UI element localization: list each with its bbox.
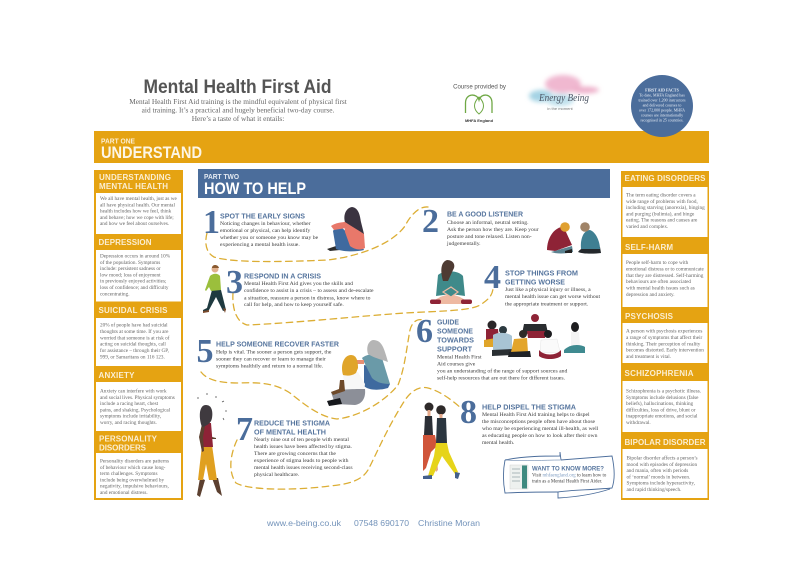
- card: suicidal crisis: [96, 306, 181, 366]
- card: understanding mental health: and behave; how we cope with life;: [100, 214, 174, 221]
- step 8: help dispel the stigma: who may be experiencing mental ill-health, as well: [482, 426, 599, 432]
- card: bipolar disorder: Symptoms include hyperactivity,: [626, 481, 695, 487]
- step 7: reduce the stigma of mental health: [236, 411, 353, 478]
- step 4: stop things from getting worse: GETTING WORSE: [505, 278, 565, 286]
- step 6: guide someone towards support: 6: [416, 313, 433, 350]
- card: depression: low mood; loss of enjoyment: [100, 271, 161, 278]
- step 4: stop things from getting worse: [484, 259, 601, 308]
- card: suicidal crisis: 20% of people have had suicidal: [100, 322, 168, 328]
- step 8: help dispel the stigma: [460, 394, 599, 446]
- title: Mental Health First Aid: [144, 76, 332, 98]
- card: personality disorders: Personality disorders are patterns: [100, 458, 169, 464]
- callout: first aid facts: trained over 1,200 instructors: [638, 98, 686, 104]
- step 3: respond in a crisis: confidence to assist in a crisis – to assess and de-escalate: [244, 287, 374, 294]
- step 1: spot the early signs: whether you or someone you know may be: [220, 235, 319, 241]
- card: schizophrenia: [622, 369, 708, 432]
- callout: first aid facts: over 172,000 people. MHFA: [639, 108, 685, 114]
- step 2: be a good listener: BE A GOOD LISTENER: [447, 210, 523, 218]
- card: understanding mental health: health includes how we feel, think: [100, 208, 172, 215]
- card: anxiety: pains, and shaking. Psychological: [100, 407, 171, 413]
- step 1: spot the early signs: experiencing a mental health issue.: [220, 242, 300, 248]
- step 6: guide someone towards support: you an understanding of the range of support sources and: [437, 368, 567, 374]
- card: bipolar disorder: [622, 438, 708, 498]
- step 8: help dispel the stigma: 8: [460, 394, 477, 431]
- step 6: guide someone towards support: SOMEONE: [437, 326, 473, 336]
- step 1: spot the early signs: Noticing changes in behaviour, whether: [220, 221, 311, 227]
- step 6: guide someone towards support: SUPPORT: [437, 344, 472, 354]
- step 6: guide someone towards support: self-help resources that are out there for different issues.: [437, 374, 566, 382]
- card: schizophrenia: Schizophrenia is a psychotic illness.: [626, 388, 701, 394]
- icon: man walking: [203, 265, 226, 313]
- step 7: reduce the stigma of mental health: 7: [236, 411, 253, 448]
- icon: woman sitting alone: [327, 207, 365, 251]
- step 1: spot the early signs: SPOT THE EARLY SIGNS: [220, 212, 305, 220]
- card: psychosis: a range of symptoms that affect their: [626, 334, 703, 341]
- step 3: respond in a crisis: [226, 264, 374, 308]
- card: schizophrenia: Symptoms include delusions (false: [626, 394, 699, 401]
- logo: course provider MHFA England: Course provided by: [453, 84, 507, 90]
- card: psychosis: PSYCHOSIS: [625, 312, 674, 321]
- card: psychosis: [622, 312, 708, 363]
- step 4: stop things from getting worse: 4: [484, 259, 501, 296]
- card: self-harm: that they are distressed. Self-harming: [626, 272, 704, 279]
- card: understanding mental health: and how we feel about ourselves.: [100, 220, 169, 227]
- card: eating disorders: and purging (bulimia), and binge: [626, 210, 695, 217]
- card: suicidal crisis: acting on suicidal thoughts, call: [100, 342, 166, 348]
- part two banner: [198, 169, 610, 198]
- card: depression: [96, 238, 181, 302]
- callout: first aid facts: To date, MHFA England has: [639, 92, 685, 98]
- card: eating disorders: wide range of problems with food,: [626, 198, 698, 205]
- step 3: respond in a crisis: call for help, and how to keep yourself safe.: [244, 301, 344, 308]
- step 6: guide someone towards support: Mental Health First: [437, 354, 482, 360]
- step 7: reduce the stigma of mental health: REDUCE THE STIGMA: [254, 419, 330, 428]
- card: bipolar disorder: and mania, often with periods: [626, 467, 688, 474]
- logo: Energy Being: Energy Being: [538, 93, 589, 104]
- icon: course manual: [510, 465, 528, 489]
- card: self-harm: People self-harm to cope with: [626, 259, 689, 266]
- card: suicidal crisis: 999, or Samaritans on 116 123.: [100, 354, 165, 360]
- icon: woman walking surrounded by stigma marks: [197, 393, 227, 497]
- card: psychosis: thinking. Their perception of reality: [626, 340, 701, 347]
- part one banner: UNDERSTAND: [101, 144, 202, 162]
- step 3: respond in a crisis: Mental Health First Aid gives you the skills and: [244, 281, 353, 287]
- step 8: help dispel the stigma: mental health.: [482, 440, 515, 446]
- card: psychosis: becomes distorted. Early intervention: [626, 348, 704, 354]
- icon: two people talking: [547, 222, 601, 254]
- part two banner: PART TWO: [204, 174, 240, 181]
- card: anxiety: and social lives. Physical symptoms: [100, 395, 175, 401]
- card: personality disorders: term challenges. Symptoms: [100, 471, 158, 477]
- card: schizophrenia: inappropriate emotions, and social: [626, 414, 698, 420]
- card: depression: in previously enjoyed activities;: [100, 279, 167, 285]
- step 7: reduce the stigma of mental health: health issues have been affected by stigma.: [254, 443, 353, 450]
- step 5: help someone recover faster: Help is vital. The sooner a person gets support, the: [216, 350, 332, 356]
- card: self-harm: SELF-HARM: [625, 243, 673, 252]
- step 5: help someone recover faster: HELP SOMEONE RECOVER FASTER: [216, 340, 339, 349]
- step 8: help dispel the stigma: the misconceptions people often have about those: [482, 418, 596, 425]
- card: schizophrenia: SCHIZOPHRENIA: [624, 369, 694, 378]
- step 7: reduce the stigma of mental health: experience of stigma leads to people with: [254, 457, 349, 464]
- step 2: be a good listener: 2: [422, 203, 439, 240]
- icon: woman comforting a friend: [327, 340, 390, 406]
- step 3: respond in a crisis: a situation, reassure a person in distress, know where to: [244, 296, 371, 302]
- card: schizophrenia: beliefs), hallucinations, thinking: [626, 400, 694, 407]
- card: eating disorders: including starving (anorexia), binging: [626, 204, 705, 211]
- card: eating disorders: EATING DISORDERS: [624, 174, 706, 183]
- card: bipolar disorder: Bipolar disorder affects a person’s: [626, 454, 698, 462]
- step 7: reduce the stigma of mental health: physical healthcare.: [254, 472, 300, 478]
- card: anxiety: ANXIETY: [98, 371, 135, 380]
- logo: course provider MHFA England: MHFA England: [465, 118, 494, 123]
- step 1: spot the early signs: emotional or physical, can help identify: [220, 227, 310, 234]
- step 8: help dispel the stigma: as educating people on how to look after their own: [482, 432, 598, 439]
- step 4: stop things from getting worse: the appropriate treatment or support.: [505, 302, 589, 308]
- step 2: be a good listener: posture and tone relaxed. Listen non-: [447, 234, 532, 240]
- step 2: be a good listener: [422, 203, 539, 247]
- dashed path: step 1 to 2: [206, 207, 428, 262]
- card: depression: DEPRESSION: [98, 238, 152, 247]
- card: eating disorders: varied and complex.: [626, 224, 668, 230]
- card: anxiety: worry, and racing thoughts.: [100, 420, 157, 426]
- step 4: stop things from getting worse: Just like a physical injury or illness, a: [505, 287, 591, 293]
- card: anxiety: include a racing heart, chest: [100, 401, 159, 407]
- intro text: Here’s a taste of what it entails:: [192, 114, 284, 123]
- card: personality disorders: of behaviour which cause long-: [100, 464, 166, 471]
- card: depression: of the population. Symptoms: [100, 259, 160, 266]
- card: bipolar disorder: and rapid thinking/speech.: [626, 487, 681, 493]
- card: understanding mental health: UNDERSTANDING: [99, 173, 171, 182]
- footer contact details: Christine Moran: [418, 518, 480, 528]
- card: self-harm: depression and anxiety.: [626, 292, 674, 298]
- step 7: reduce the stigma of mental health: Nearly nine out of ten people with mental: [254, 436, 349, 443]
- step 4: stop things from getting worse: mental health issue can get worse without: [505, 294, 601, 300]
- card: psychosis: and treatment is vital.: [626, 354, 671, 360]
- card: schizophrenia: difficulties, loss of drive, blunt or: [626, 406, 696, 413]
- part one banner: [94, 131, 709, 163]
- card: eating disorders: [622, 174, 708, 237]
- step 2: be a good listener: Ask the person how they are. Keep your: [447, 227, 539, 233]
- footer contact details: www.e-being.co.uk: [266, 518, 342, 528]
- part two banner: HOW TO HELP: [204, 180, 306, 198]
- card: personality disorders: PERSONALITY: [99, 434, 158, 444]
- card: personality disorders: negativity, impulsive behaviours,: [100, 484, 169, 490]
- card: bipolar disorder: of ‘normal’ moods in between.: [626, 473, 690, 480]
- card: understanding mental health: We all have mental health, just as we: [100, 196, 177, 202]
- step 2: be a good listener: judgementally.: [446, 241, 481, 247]
- card: personality disorders: DISORDERS: [99, 444, 147, 452]
- callout: first aid facts: courses are internationally: [641, 112, 683, 118]
- card: personality disorders: include being overwhelmed by: [100, 477, 165, 483]
- card: anxiety: [96, 371, 181, 431]
- dashed path: step 3 to 4: [233, 289, 493, 325]
- dashed path: step 5 to 6: [201, 320, 425, 419]
- step 1: spot the early signs: 1: [203, 204, 220, 241]
- step 5: help someone recover faster: sooner they can recover or learn to manage their: [216, 356, 326, 362]
- logo: Energy Being: in the moment: [547, 106, 574, 111]
- step 6: guide someone towards support: GUIDE: [437, 318, 459, 326]
- card: self-harm: [622, 243, 708, 307]
- card: self-harm: emotional distress or to communicate: [626, 266, 704, 272]
- step 3: respond in a crisis: 3: [226, 264, 243, 301]
- callout: first aid facts: [631, 75, 693, 137]
- part one banner: PART ONE: [101, 138, 135, 146]
- card: understanding mental health: MENTAL HEALTH: [99, 182, 168, 191]
- card: suicidal crisis: thoughts at some time. If you are: [100, 328, 169, 335]
- card: depression: include: persistent sadness or: [100, 266, 161, 272]
- card: understanding mental health: all have physical health. Our mental: [100, 202, 175, 208]
- dashed path: step 7 to 8: [231, 388, 462, 489]
- step 7: reduce the stigma of mental health: There are growing concerns that the: [254, 451, 336, 457]
- footer contact details: [266, 518, 480, 528]
- intro text: aid training. It’s a practical and hugely beneficial two-day course.: [142, 106, 335, 114]
- icon: woman sitting cross-legged: [430, 260, 472, 304]
- intro text: [129, 97, 347, 123]
- step 6: guide someone towards support: TOWARDS: [437, 336, 474, 344]
- footer contact details: 07548 690170: [354, 518, 409, 528]
- callout: first aid facts: FIRST AID FACTS: [645, 88, 680, 92]
- panel: left column conditions: [94, 170, 183, 500]
- panel: right column conditions: [621, 171, 709, 500]
- card: depression: concentrating.: [100, 291, 130, 297]
- intro text: Mental Health First Aid training is the mindful equivalent of physical first: [129, 97, 347, 106]
- card: understanding mental health: [96, 173, 181, 234]
- callout: want to know more: Visit mhfaengland.org to learn how to: [532, 474, 607, 478]
- step 5: help someone recover faster: 5: [196, 333, 214, 370]
- card: eating disorders: eating. The reasons and causes are: [626, 218, 698, 224]
- card: depression: Depression occurs in around 10%: [100, 254, 171, 260]
- callout: want to know more: WANT TO KNOW MORE?: [532, 466, 604, 472]
- callout: want to know more: train as a Mental Health First Aider.: [532, 480, 602, 484]
- callout: first aid facts: and delivered courses to: [643, 102, 681, 108]
- step 2: be a good listener: Choose an informal, neutral setting.: [447, 219, 529, 226]
- card: psychosis: A person with psychosis experiences: [626, 328, 702, 334]
- card: bipolar disorder: BIPOLAR DISORDER: [624, 438, 706, 447]
- card: bipolar disorder: mood with episodes of depression: [626, 461, 698, 468]
- card: anxiety: Anxiety can interfere with work: [100, 388, 167, 394]
- card: self-harm: with mental health issues such as: [626, 286, 695, 292]
- step 8: help dispel the stigma: HELP DISPEL THE STIGMA: [482, 402, 576, 412]
- card: schizophrenia: withdrawal.: [626, 420, 651, 426]
- logo: Energy Being: [529, 75, 599, 111]
- card: suicidal crisis: worried that someone is at risk of: [100, 334, 170, 341]
- step 8: help dispel the stigma: Mental Health First Aid training helps to dispel: [482, 412, 590, 418]
- card: personality disorders: [96, 434, 181, 498]
- card: eating disorders: The term eating disorder covers a: [626, 192, 696, 198]
- icon: support group sitting in a circle: [484, 314, 585, 359]
- card: personality disorders: and emotional distress.: [100, 490, 148, 496]
- step 6: guide someone towards support: Aid courses give: [437, 362, 476, 368]
- step 4: stop things from getting worse: STOP THINGS FROM: [505, 268, 578, 278]
- step 3: respond in a crisis: RESPOND IN A CRISIS: [244, 272, 321, 280]
- card: suicidal crisis: for assistance – through their GP,: [100, 347, 169, 354]
- icon: two women walking: [423, 402, 460, 479]
- step 7: reduce the stigma of mental health: OF MENTAL HEALTH: [254, 428, 326, 437]
- step 5: help someone recover faster: [196, 333, 339, 370]
- step 7: reduce the stigma of mental health: mental health issues receiving second-class: [254, 465, 353, 471]
- step 5: help someone recover faster: symptoms healthily and return to a normal life.: [216, 362, 324, 370]
- card: depression: loss of confidence; and difficulty: [100, 284, 169, 291]
- callout: first aid facts: recognised in 25 countries.: [640, 118, 684, 122]
- step 1: spot the early signs: [203, 204, 319, 248]
- card: anxiety: symptoms include irritability,: [100, 414, 161, 420]
- logo: course provider MHFA England: [453, 84, 507, 123]
- card: suicidal crisis: SUICIDAL CRISIS: [98, 306, 168, 315]
- card: self-harm: behaviours are often associated: [626, 278, 691, 285]
- step 6: guide someone towards support: [416, 313, 567, 382]
- callout: want to know more: [504, 452, 614, 498]
